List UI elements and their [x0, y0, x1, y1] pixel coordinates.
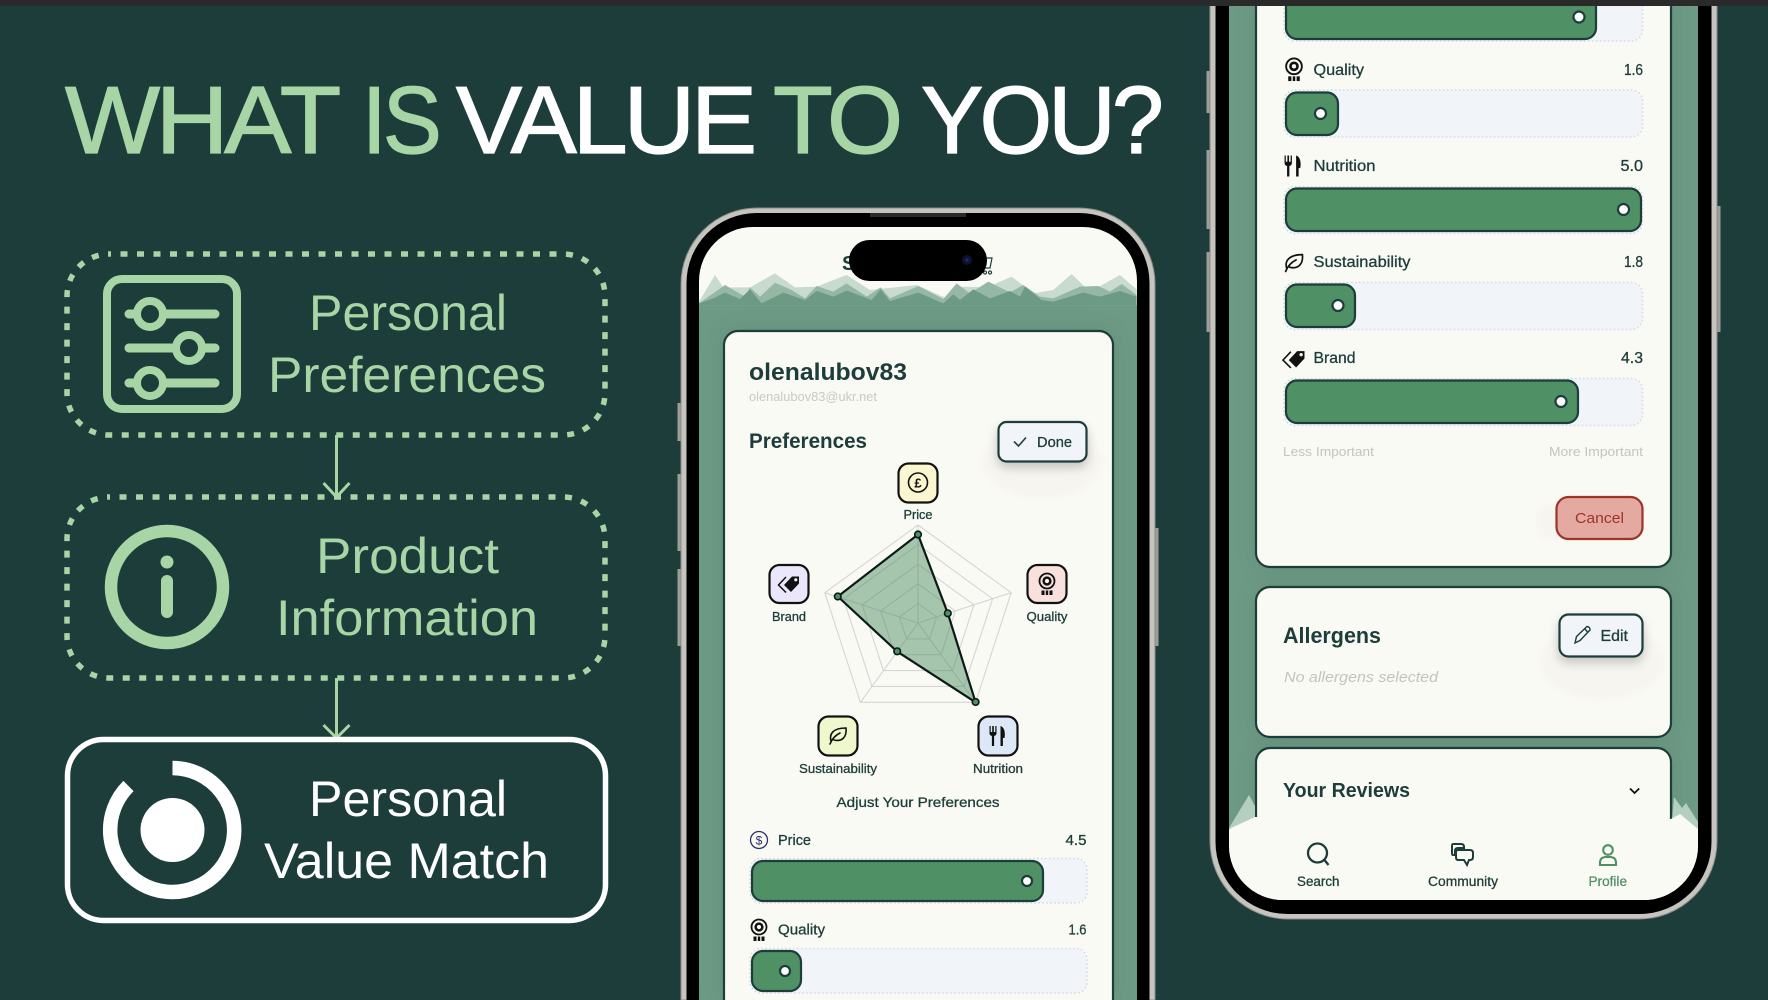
nav: profile — [1588, 845, 1627, 889]
label: personal value match: Personal — [309, 771, 507, 827]
window top bar — [0, 0, 1768, 6]
nav: community: Community — [1428, 874, 1498, 889]
label: product information — [276, 528, 538, 646]
button: edit — [1551, 613, 1651, 670]
slider: nutrition — [1284, 156, 1643, 234]
nav: search: Search — [1297, 874, 1340, 889]
slider: brand: Brand — [1314, 350, 1356, 367]
slider: price: $ — [756, 834, 763, 848]
slider: quality: 1.6 — [1068, 922, 1086, 938]
button: cancel: Cancel — [1575, 510, 1624, 527]
bottom navigation — [1229, 814, 1698, 900]
title: WHAT — [65, 67, 339, 174]
heading: allergens: Allergens — [1283, 623, 1381, 648]
slider: price: Price — [778, 833, 811, 849]
phone: left, preferences radar — [678, 208, 1158, 1000]
arrow: information to match — [324, 678, 350, 738]
slider: brand — [1283, 350, 1643, 426]
slider: quality: Quality — [778, 922, 826, 938]
phone frame — [1206, 0, 1720, 919]
button: edit: Edit — [1600, 628, 1629, 645]
button: done — [990, 420, 1095, 475]
slider: price: 4.5 — [1066, 833, 1086, 849]
radar axis: price: £ — [914, 476, 922, 490]
label: personal preferences: Personal — [309, 285, 507, 341]
header mountains — [699, 273, 1137, 305]
label: product information: Information — [276, 590, 538, 646]
label: product information: Product — [316, 528, 499, 584]
nav: community — [1428, 844, 1498, 889]
panel: preferences card — [1256, 0, 1671, 567]
label: personal preferences: Preferences — [268, 347, 546, 403]
email: olenalubov83@ukr.net — [749, 390, 878, 404]
label: personal value match — [264, 771, 549, 889]
slider: sustainability: Sustainability — [1314, 254, 1411, 271]
heading: adjust your preferences: Adjust Your Preferences — [836, 794, 1000, 810]
screen — [699, 227, 1137, 1000]
bottom mountains — [1229, 795, 1698, 832]
scale legend — [1284, 447, 1643, 458]
panel: your reviews card — [1256, 748, 1671, 900]
scale legend: Less Important — [1283, 444, 1374, 459]
username: olenalubov83 — [749, 359, 907, 386]
radar axis: quality — [1026, 565, 1068, 624]
slider: price (partial) — [1283, 6, 1644, 42]
label: personal preferences — [268, 285, 546, 403]
radar axis: price: Price — [904, 508, 933, 522]
slider: nutrition: Nutrition — [1314, 158, 1376, 175]
panel: product information — [67, 497, 605, 678]
peeking header title and cart: S — [842, 253, 855, 275]
label: personal value match: Value Match — [264, 833, 549, 889]
radar axis: nutrition — [973, 716, 1023, 776]
title — [65, 67, 1161, 174]
radar axis: sustainability — [799, 716, 878, 776]
button: done: Done — [1037, 435, 1072, 451]
slider: sustainability: 1.8 — [1624, 254, 1643, 271]
radar axis: brand — [770, 565, 808, 624]
title: VALUE — [456, 67, 753, 174]
nav: search — [1297, 844, 1340, 889]
slider: brand: 4.3 — [1621, 350, 1643, 367]
slider: quality: Quality — [1314, 62, 1364, 79]
radar chart — [825, 525, 1011, 705]
slider: quality — [750, 920, 1087, 993]
radar axis: sustainability: Sustainability — [799, 762, 878, 776]
title: TO — [773, 67, 899, 174]
slider: nutrition: 5.0 — [1620, 158, 1643, 175]
title: IS — [362, 67, 438, 174]
nav: profile: Profile — [1588, 874, 1627, 889]
heading: preferences: Preferences — [749, 430, 867, 453]
title: YOU? — [921, 67, 1161, 174]
panel: allergens card — [1256, 587, 1671, 737]
arrow: preferences to information — [324, 435, 350, 497]
slider: sustainability — [1284, 254, 1643, 330]
icon: chevron — [1630, 788, 1639, 793]
panel: personal value match — [68, 740, 606, 920]
radar axis: quality: Quality — [1026, 610, 1068, 624]
radar axis: nutrition: Nutrition — [973, 762, 1023, 776]
icon: sliders — [107, 279, 237, 409]
note: no allergens: No allergens selected — [1284, 670, 1439, 686]
radar axis: brand: Brand — [772, 610, 806, 624]
radar axis: price — [898, 464, 938, 522]
dynamic island — [849, 240, 987, 281]
heading: your reviews: Your Reviews — [1283, 779, 1410, 802]
icon: info — [111, 531, 223, 643]
panel: profile card — [724, 331, 1113, 1000]
panel: personal preferences — [67, 254, 605, 435]
button: cancel — [1555, 496, 1644, 540]
icon: match ring — [110, 768, 234, 892]
scale legend: More Important — [1549, 444, 1643, 459]
phone frame — [678, 208, 1158, 1000]
slider: price — [750, 832, 1087, 903]
screen — [1229, 0, 1698, 900]
slider: quality — [1284, 58, 1643, 137]
slider: quality: 1.6 — [1624, 62, 1643, 79]
phone: right, preferences and allergens — [1206, 0, 1720, 919]
